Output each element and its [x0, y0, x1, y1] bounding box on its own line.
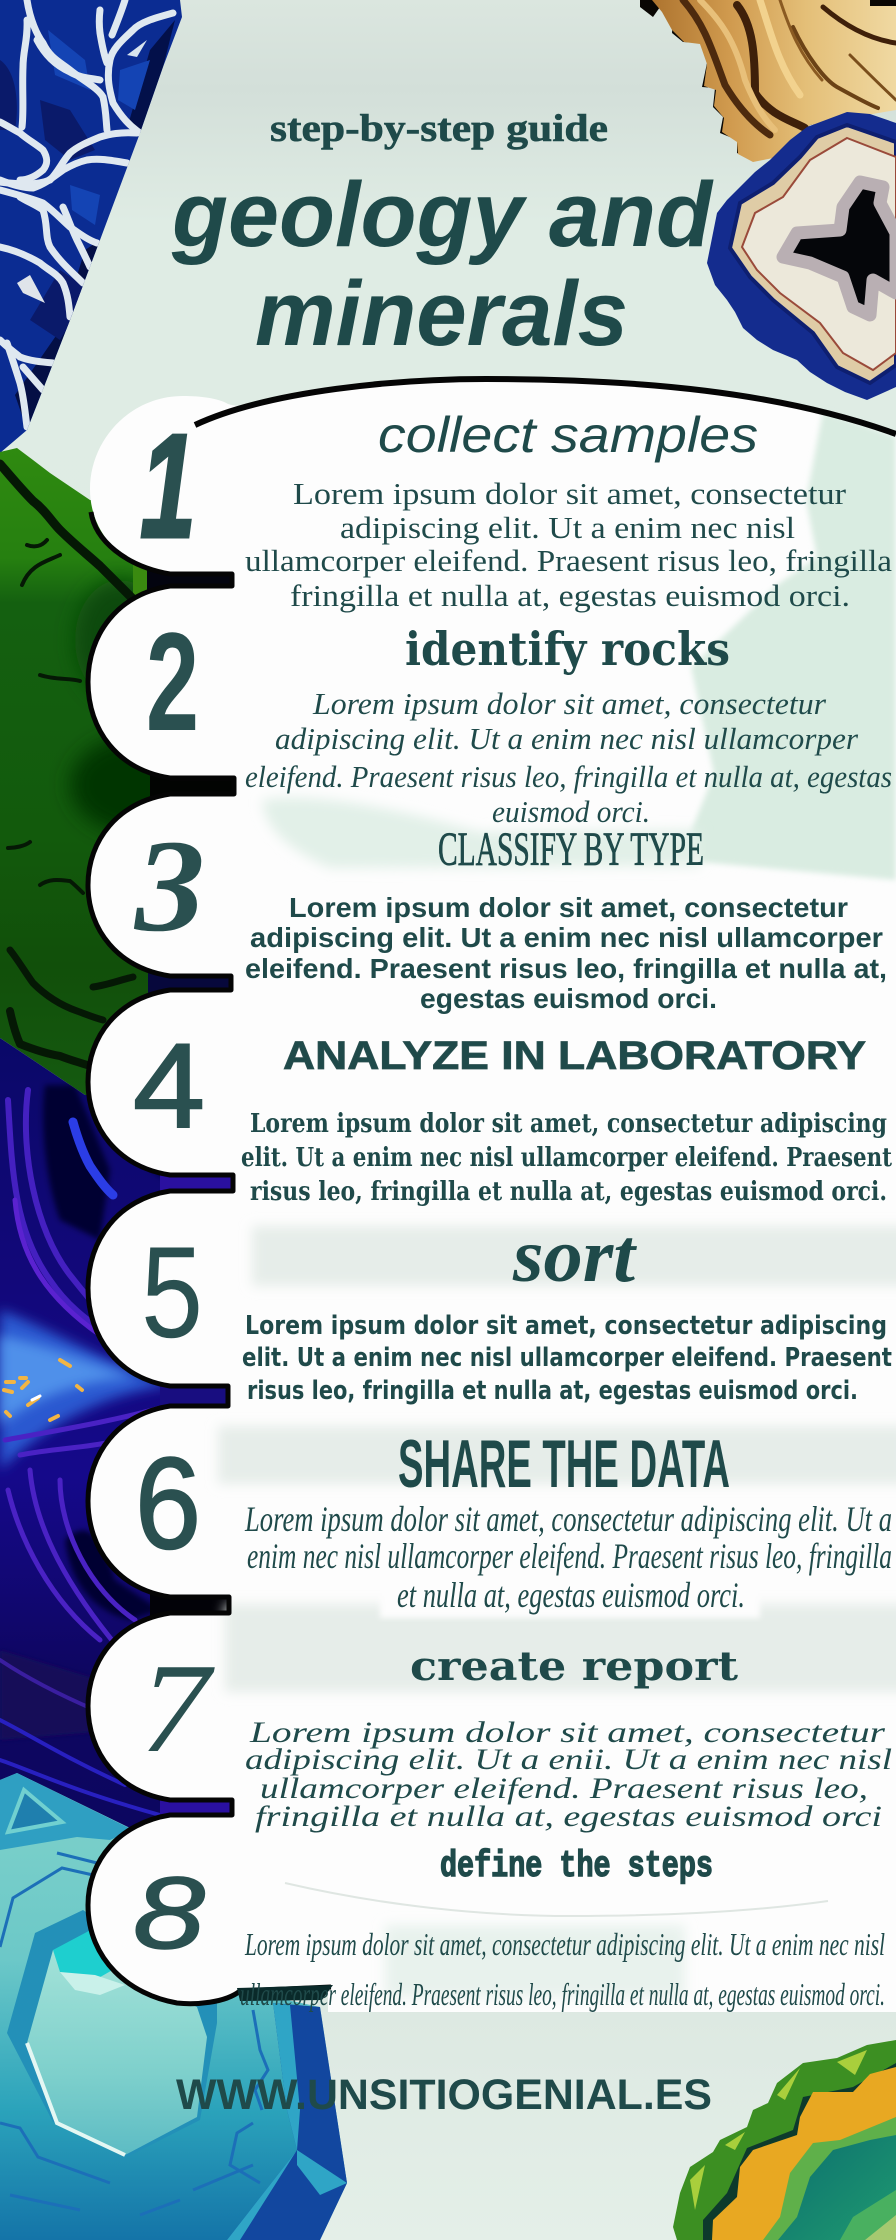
number 8: 8	[133, 1856, 205, 1970]
step 2 body: Lorem ipsum dolor sit amet, consectetur	[312, 686, 827, 721]
step 7 body: fringilla et nulla at, egestas euismod orci	[255, 1800, 882, 1833]
step 2 body	[245, 686, 892, 829]
pale band: step 5 heading	[252, 1226, 896, 1286]
step 4	[133, 1019, 892, 1207]
step 2	[146, 603, 892, 829]
number 6: 6	[135, 1430, 201, 1576]
step 8 body	[240, 1926, 885, 2012]
step 6 body: et nulla at, egestas euismod orci.	[397, 1575, 745, 1615]
number 2: 2	[146, 603, 199, 760]
pale mint wash behind step 8 text	[385, 1925, 685, 1997]
number 1: 1	[140, 404, 196, 569]
step 6 body	[244, 1499, 892, 1615]
step 7 body: Lorem ipsum dolor sit amet, consectetur	[249, 1716, 885, 1749]
step 3 body: adipiscing elit. Ut a enim nec nisl ullamcorper	[250, 922, 883, 953]
header: main title line 1: geology and	[171, 164, 714, 266]
step 1 body: fringilla et nulla at, egestas euismod orci.	[290, 578, 850, 613]
step 6	[135, 1426, 892, 1615]
number 5: 5	[141, 1219, 203, 1365]
step 5 body	[242, 1311, 892, 1406]
header: main title line 2: minerals	[255, 263, 628, 365]
image: blue mineral with white veins	[0, 0, 182, 453]
footer: website: WWW.UNSITIOGENIAL.ES	[176, 2071, 712, 2119]
step 7 body	[245, 1716, 892, 1833]
step 7 body: ullamcorper eleifend. Praesent risus leo,	[260, 1772, 868, 1805]
step 7 heading: create report	[410, 1643, 739, 1690]
step 2 body: euismod orci.	[492, 794, 650, 829]
image: teal crystal bottom left	[0, 1773, 347, 2240]
step 3 body: egestas euismod orci.	[420, 983, 717, 1014]
panel outline: black scalloped border and top curve	[88, 379, 896, 2004]
image: sliced geode right	[707, 112, 896, 400]
pale band: step 7 heading	[225, 1604, 896, 1692]
pale mint patch: upper right	[691, 411, 896, 880]
step 1 body: Lorem ipsum dolor sit amet, consectetur	[293, 476, 847, 511]
white halo: step 6 last line	[380, 1580, 760, 1618]
step 1 body	[245, 476, 892, 613]
step 7 body: adipiscing elit. Ut a enii. Ut a enim nec nisl	[245, 1743, 892, 1776]
image: purple cosmic mineral left	[0, 1038, 160, 1828]
header: subtitle: step-by-step guide	[270, 107, 608, 150]
number 7: 7	[140, 1637, 215, 1779]
step 3 body	[245, 892, 887, 1014]
step 3 body: Lorem ipsum dolor sit amet, consectetur	[289, 892, 848, 923]
step 2 body: adipiscing elit. Ut a enim nec nisl ullamcorper	[275, 721, 859, 756]
step 1 body: adipiscing elit. Ut a enim nec nisl	[340, 510, 795, 545]
panel: white scalloped step panel	[88, 379, 896, 2012]
connector bars between scallops	[147, 570, 236, 1819]
image: green mineral left	[0, 448, 240, 1095]
image: green and yellow agate bottom right	[673, 2040, 896, 2240]
step 1 heading: collect samples	[378, 407, 758, 463]
step 2 heading: identify rocks	[405, 622, 730, 676]
step 5 heading: sort	[512, 1214, 638, 1298]
step 4 body	[241, 1109, 892, 1207]
step 3 heading: CLASSIFY BY TYPE	[438, 823, 704, 876]
number 3: 3	[133, 812, 205, 959]
step 5	[141, 1214, 892, 1406]
pale mint patch: behind step 2 text	[262, 798, 700, 868]
step 8 heading: define the steps	[440, 1846, 713, 1888]
step 7	[140, 1637, 892, 1833]
step 8	[133, 1846, 885, 2012]
number 4: 4	[133, 1019, 205, 1153]
faint curve under step 8 heading	[285, 1883, 828, 1916]
pale band: step 6 heading	[218, 1426, 896, 1484]
step 3	[133, 812, 887, 1014]
step 1	[140, 404, 892, 613]
step 4 heading: ANALYZE IN LABORATORY	[283, 1034, 866, 1078]
image: tan agate top right	[640, 0, 896, 170]
step 1 body: ullamcorper eleifend. Praesent risus leo, fringilla	[245, 543, 892, 578]
step 3 body: eleifend. Praesent risus leo, fringilla et nulla at,	[245, 953, 887, 984]
